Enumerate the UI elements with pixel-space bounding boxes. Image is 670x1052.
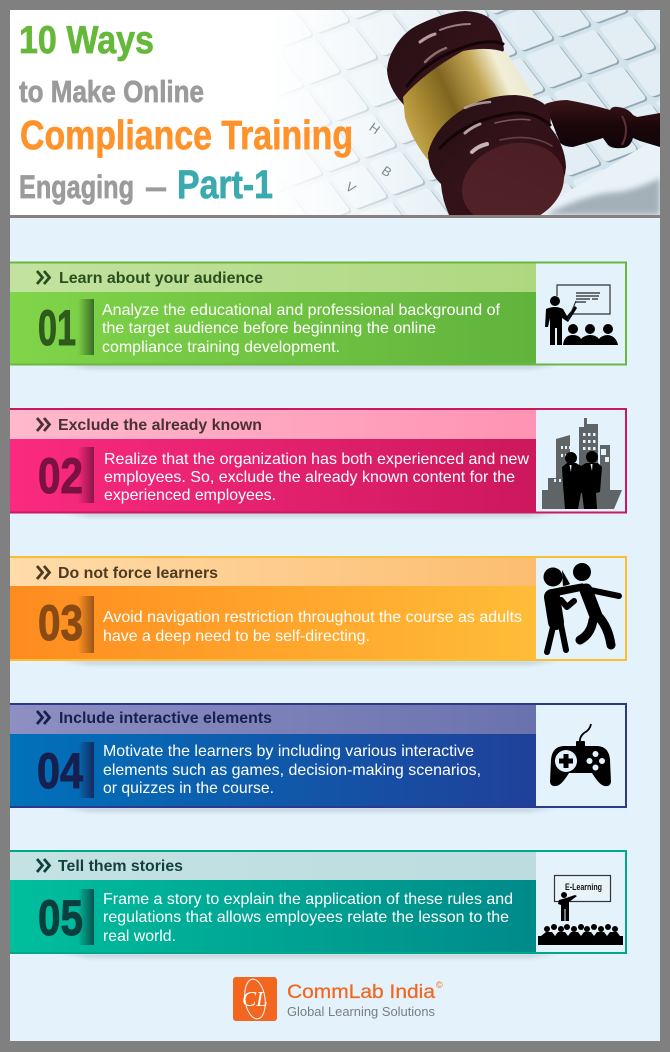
body text: regulations that allows employees relate the lesson to the [103, 909, 509, 926]
chevrons [37, 271, 50, 284]
body text [102, 302, 501, 356]
body text: real world. [103, 928, 176, 945]
body text: Motivate the learners by including various interactive [103, 743, 474, 760]
heading: Tell them stories [58, 858, 183, 875]
title line: Part-1: Part-1 [177, 163, 273, 207]
body text: Avoid navigation restriction throughout the course as adults [103, 609, 522, 626]
panel 3: Do not force learners [10, 557, 626, 665]
gavel handle [545, 100, 660, 148]
icon: two figures pushing [544, 563, 619, 652]
key letters [343, 120, 395, 196]
title dash: — [146, 169, 166, 205]
gavel face [462, 142, 564, 215]
light blue page body [10, 218, 660, 1041]
body text [104, 451, 529, 504]
body text: elements such as games, decision-making scenarios, [103, 762, 481, 779]
body text: have a deep need to be self-directing. [103, 628, 370, 645]
body text [103, 891, 513, 945]
logo tagline: Global Learning Solutions [287, 1004, 435, 1019]
logo mark [233, 977, 277, 1021]
body text: the target audience before beginning the online [102, 320, 436, 337]
heading: Do not force learners [58, 565, 218, 582]
keyboard photo background [10, 10, 660, 215]
key letters: V [343, 179, 359, 196]
number: 05 [38, 890, 83, 946]
icon: presenter with audience [545, 285, 618, 345]
chevrons [37, 418, 50, 431]
gavel collar highlight [622, 116, 626, 145]
body text [103, 609, 522, 645]
icon: E-Learning presenter [538, 876, 623, 945]
panel 2: Exclude the already known [10, 409, 626, 517]
logo mark: CL [242, 987, 268, 1011]
body text: compliance training development. [102, 339, 340, 356]
title [19, 19, 353, 207]
number: 04 [37, 743, 83, 799]
logo name: CommLab India [287, 982, 435, 1003]
chevrons [37, 566, 50, 579]
body text: employees. So, exclude the already known content for the [104, 469, 515, 486]
gavel ridges and highlights [407, 24, 552, 152]
CommLab India logo [233, 977, 443, 1021]
title line: Engaging: Engaging [19, 169, 134, 205]
gavel lower head [428, 95, 566, 217]
number: 02 [38, 448, 83, 504]
key letters: H [367, 120, 383, 137]
panel 5: Tell them stories [10, 851, 626, 958]
body text: Realize that the organization has both experienced and new [104, 451, 529, 468]
header divider [10, 215, 660, 218]
heading: Exclude the already known [58, 417, 262, 434]
body text [103, 743, 481, 797]
title line: to Make Online: to Make Online [19, 74, 204, 109]
body text: or quizzes in the course. [103, 780, 274, 797]
heading: Learn about your audience [59, 270, 263, 287]
key letters: B [379, 163, 395, 180]
icon: businessmen and city [542, 418, 622, 509]
chevrons [37, 711, 50, 724]
registered mark: © [436, 980, 443, 990]
gavel upper head [387, 11, 504, 106]
body text: Frame a story to explain the application of these rules and [103, 891, 513, 908]
body text: Analyze the educational and professional background of [102, 302, 501, 319]
title line: Compliance Training: Compliance Training [20, 112, 353, 158]
header banner [10, 10, 660, 215]
chevrons [37, 859, 50, 872]
number: 03 [38, 595, 83, 651]
body text: experienced employees. [104, 487, 276, 504]
panel 1: Learn about your audience [10, 262, 626, 369]
gold band [403, 49, 535, 160]
heading: Include interactive elements [59, 710, 272, 727]
icon: E-Learning presenter: E-Learning [565, 882, 602, 892]
panel 4: Include interactive elements [10, 704, 626, 812]
number: 01 [38, 300, 76, 356]
icon: game controller [550, 724, 611, 786]
title line: 10 Ways: 10 Ways [19, 19, 154, 62]
gavel [387, 11, 660, 215]
